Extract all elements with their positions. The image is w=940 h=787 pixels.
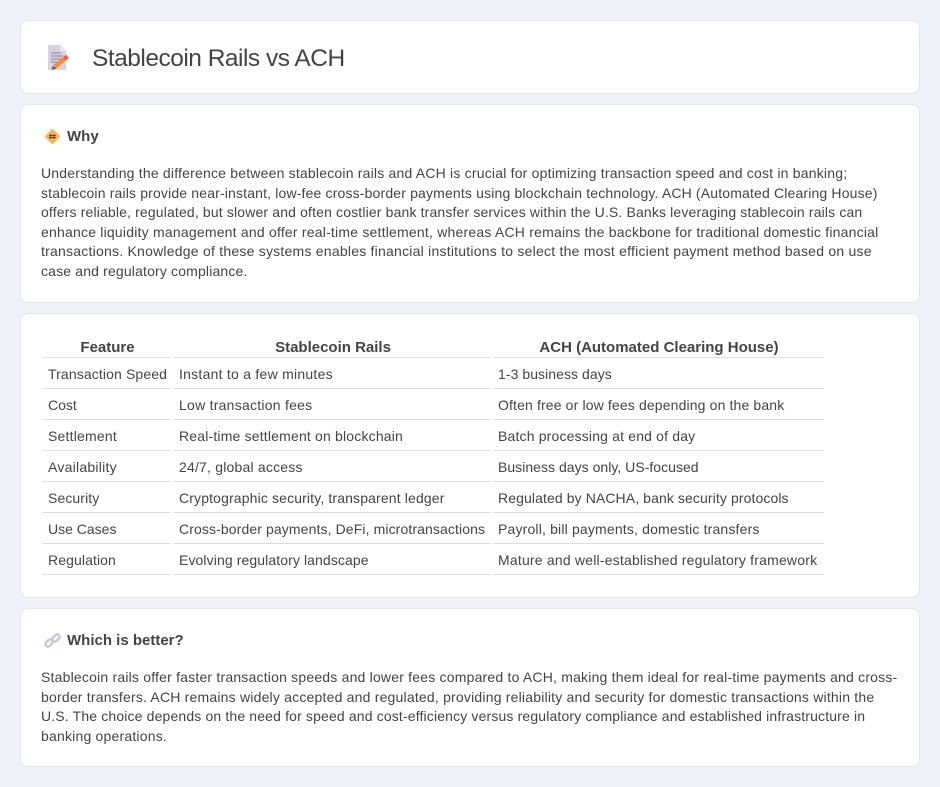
text block: verdict: banking operations. xyxy=(41,728,167,744)
table header row: Feature xyxy=(80,339,135,356)
panel: comparison table xyxy=(20,313,920,598)
row: transaction speed: Transaction Speed xyxy=(48,366,167,382)
heading: why: Why xyxy=(67,128,99,145)
row: security: Cryptographic security, transparent ledger xyxy=(179,490,445,506)
row: availability: 24/7, global access xyxy=(179,459,303,475)
row: availability xyxy=(42,459,824,482)
text block: why explanation: stablecoin rails provide near-instant, low-fee cross-border payments using blockchain technology. ACH (Automated Clearing House) xyxy=(41,185,878,201)
icon: chain link xyxy=(44,633,61,648)
text block: verdict: U.S. The choice depends on the need for speed and cost-efficiency versus regulatory compliance and established infrastructure in xyxy=(41,708,865,724)
text block: why explanation: enhance liquidity management and offer real-time settlement, whereas ACH remains the backbone for traditional domestic financial xyxy=(41,224,878,240)
row: regulation: Mature and well-established regulatory framework xyxy=(498,552,817,568)
panel: why xyxy=(20,104,920,303)
row: settlement xyxy=(42,428,824,451)
text block: verdict: Stablecoin rails offer faster transaction speeds and lower fees compared to ACH, making them ideal for real-time payments and cross- xyxy=(41,669,897,685)
row: security: Regulated by NACHA, bank security protocols xyxy=(498,490,789,506)
row: settlement: Real-time settlement on blockchain xyxy=(179,428,403,444)
title: Stablecoin Rails vs ACH xyxy=(92,45,345,72)
row: regulation: Evolving regulatory landscape xyxy=(179,552,369,568)
row: transaction speed xyxy=(42,366,824,389)
row: availability: Availability xyxy=(48,459,117,475)
text block: why explanation: Understanding the difference between stablecoin rails and ACH is crucial for optimizing transaction speed and cost in banking; xyxy=(41,165,847,181)
table header row: Stablecoin Rails xyxy=(275,339,391,356)
row: cost: Often free or low fees depending on the bank xyxy=(498,397,784,413)
row: regulation xyxy=(42,552,824,575)
row: regulation: Regulation xyxy=(48,552,116,568)
row: security: Security xyxy=(48,490,99,506)
table header row: ACH (Automated Clearing House) xyxy=(539,339,779,356)
row: security xyxy=(42,490,824,513)
row: settlement: Settlement xyxy=(48,428,117,444)
table header row xyxy=(42,339,824,358)
panel: which is better xyxy=(20,608,920,767)
heading: which is better: Which is better? xyxy=(67,632,184,649)
icon: warning diamond xyxy=(45,129,60,144)
row: availability: Business days only, US-focused xyxy=(498,459,699,475)
text block: why explanation xyxy=(41,165,878,279)
row: cost: Cost xyxy=(48,397,77,413)
text block: why explanation: case and regulatory compliance. xyxy=(41,263,248,279)
row: use cases xyxy=(42,521,824,544)
row: transaction speed: 1-3 business days xyxy=(498,366,612,382)
text block: why explanation: transactions. Knowledge of these systems enables financial institutions to select the most efficient payment method based on use xyxy=(41,243,872,259)
row: use cases: Cross-border payments, DeFi, microtransactions xyxy=(179,521,485,537)
row: cost xyxy=(42,397,824,420)
row: transaction speed: Instant to a few minutes xyxy=(179,366,333,382)
panel: title header xyxy=(20,20,920,94)
icon: memo with pencil xyxy=(48,45,69,70)
row: cost: Low transaction fees xyxy=(179,397,312,413)
row: use cases: Payroll, bill payments, domestic transfers xyxy=(498,521,760,537)
row: settlement: Batch processing at end of day xyxy=(498,428,695,444)
text block: verdict xyxy=(41,669,897,744)
text block: why explanation: offers reliable, regulated, but slower and often costlier bank transfer services within the U.S. Banks leveraging stablecoin rails can xyxy=(41,204,862,220)
row: use cases: Use Cases xyxy=(48,521,116,537)
text block: verdict: border transfers. ACH remains widely accepted and regulated, providing reliability and security for domestic transactions within the xyxy=(41,689,874,705)
